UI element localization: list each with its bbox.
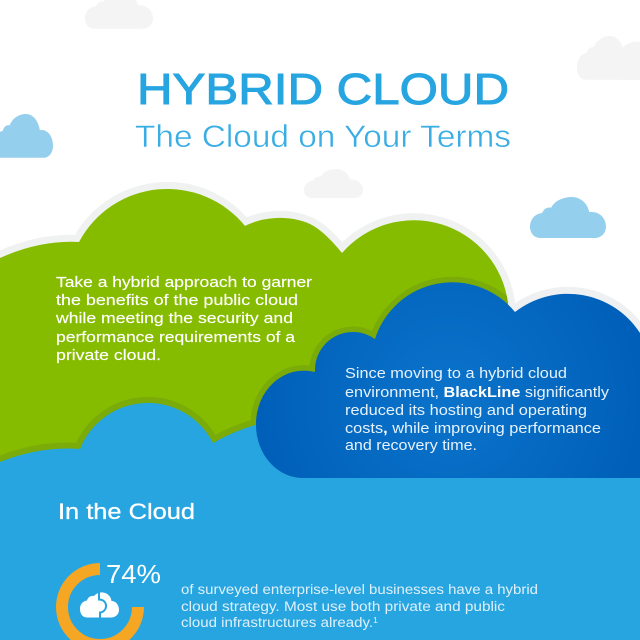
- text: statistic description: 1: [373, 616, 379, 625]
- decorative cloud: blue left: [0, 114, 53, 158]
- text: statistic description: cloud infrastructures already.: [181, 615, 353, 630]
- stat: 74%: 74%: [106, 559, 161, 589]
- text: navy cloud paragraph: Since moving to a hybrid cloud: [345, 366, 567, 382]
- text: green cloud paragraph: while meeting the security and: [55, 310, 293, 327]
- heading: in the cloud: In the Cloud: [58, 499, 195, 524]
- text: navy cloud paragraph: environment, BlackLine significantly: [345, 385, 610, 401]
- text: green cloud paragraph: performance requirements of a: [56, 329, 296, 346]
- title: HYBRID CLOUD: [137, 65, 509, 114]
- text: navy cloud paragraph: reduced its hosting and operating: [345, 403, 587, 419]
- subtitle: The Cloud on Your Terms: [135, 118, 511, 154]
- text: statistic description: of surveyed enterprise-level businesses have a hybrid: [181, 582, 538, 597]
- text: green cloud paragraph: [55, 274, 312, 364]
- icon: puzzle cloud: [80, 590, 119, 620]
- donut chart: 74 percent: [62, 569, 138, 640]
- text: green cloud paragraph: private cloud.: [56, 347, 161, 364]
- decorative cloud: grey top right: [577, 36, 640, 80]
- text: green cloud paragraph: the benefits of the public cloud: [56, 292, 298, 309]
- text: green cloud paragraph: Take a hybrid approach to garner: [56, 274, 312, 291]
- text: navy cloud paragraph: [345, 366, 610, 454]
- panel: green cloud: [0, 189, 508, 480]
- text: statistic description: cloud strategy. Most use both private and public: [181, 599, 505, 614]
- panel: navy cloud: [256, 282, 640, 478]
- text: navy cloud paragraph: and recovery time.: [345, 438, 477, 454]
- panel: light blue cloud and lower section: [0, 403, 640, 640]
- decorative cloud: grey middle: [304, 169, 363, 198]
- decorative cloud: blue right: [530, 197, 606, 238]
- text: navy cloud paragraph: costs , while improving performance: [345, 421, 601, 437]
- text: statistic description: [181, 582, 538, 630]
- decorative cloud: grey top: [85, 0, 153, 29]
